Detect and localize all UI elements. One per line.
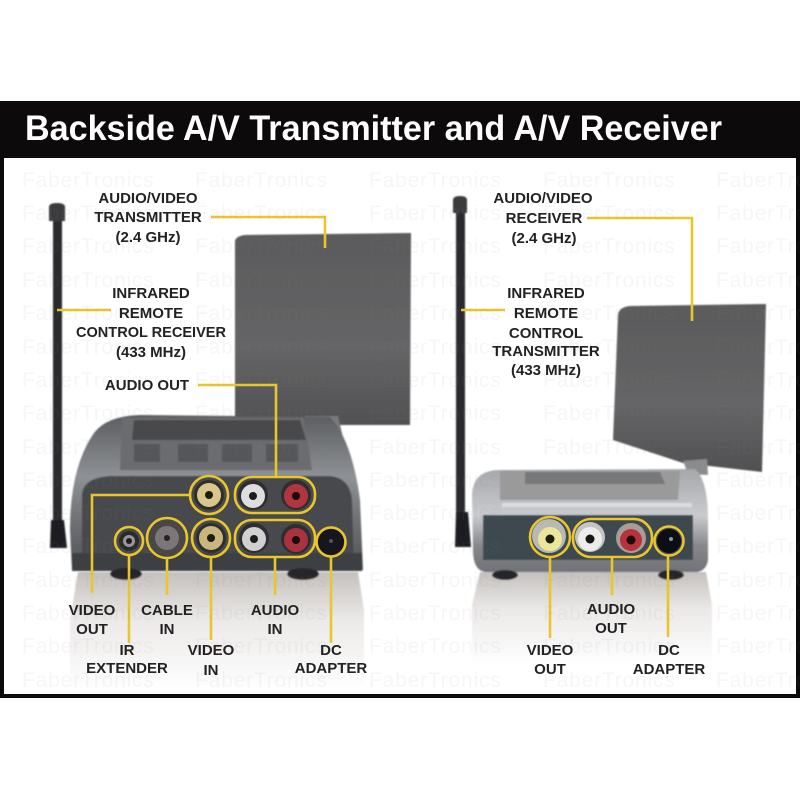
label: receiver DC adapter (633, 642, 705, 678)
label: infrared remote control receiver: (433 MHz) (116, 344, 186, 361)
label: IR extender (86, 642, 168, 677)
watermark: FaberTronics (22, 469, 155, 492)
label: receiver DC adapter: ADAPTER (633, 661, 705, 678)
watermark: FaberTronics (369, 169, 502, 192)
watermark: FaberTronics (22, 169, 155, 192)
label: infrared remote control transmitter: TRANSMITTER (492, 343, 600, 360)
jack: audio in white (239, 523, 269, 553)
watermark: FaberTronics (22, 369, 155, 392)
label: video in: IN (204, 662, 218, 679)
watermark: FaberTronics (195, 436, 328, 459)
watermark: FaberTronics (369, 302, 502, 325)
label: DC adapter: ADAPTER (295, 660, 367, 677)
watermark: FaberTronics (22, 235, 155, 258)
watermark: FaberTronics (543, 336, 676, 359)
jack: receiver audio out red (616, 523, 646, 553)
label: audio/video transmitter: TRANSMITTER (94, 209, 202, 226)
flat antenna panel: transmitter (235, 233, 411, 425)
jack: video in (196, 523, 226, 553)
watermark: FaberTronics (543, 635, 676, 658)
jack: audio out white (238, 480, 268, 510)
labels: transmitter (69, 190, 367, 679)
watermark: FaberTronics (543, 602, 676, 625)
label: audio/video receiver (493, 190, 593, 247)
label: audio in (251, 602, 299, 638)
label: infrared remote control receiver: REMOTE (119, 305, 183, 322)
housing: transmitter (70, 415, 363, 580)
watermark: FaberTronics (22, 269, 155, 292)
label: infrared remote control transmitter (492, 285, 600, 379)
watermark: FaberTronics (22, 336, 155, 359)
panel: receiver device (453, 196, 766, 665)
watermark: FaberTronics (22, 535, 155, 558)
hinge: transmitter (305, 416, 346, 450)
label: cable in (141, 602, 193, 638)
label: cable in: CABLE (141, 602, 193, 619)
label: audio in: AUDIO (251, 602, 299, 619)
label: infrared remote control transmitter: INFRARED (507, 285, 585, 302)
watermark: FaberTronics (195, 202, 328, 225)
watermark: FaberTronics (369, 602, 502, 625)
jack: cable in (149, 520, 185, 556)
watermark: FaberTronics (195, 169, 328, 192)
labels: receiver (492, 190, 705, 678)
label: audio/video receiver: RECEIVER (506, 210, 583, 227)
watermark: FaberTronics (369, 535, 502, 558)
watermark: FaberTronics (369, 402, 502, 425)
jack: DC adapter (318, 529, 344, 555)
label: audio/video transmitter: (2.4 GHz) (115, 229, 181, 246)
watermark: FaberTronics (543, 202, 676, 225)
leader lines: transmitter (57, 217, 331, 643)
watermark: FaberTronics (22, 402, 155, 425)
watermark: FaberTronics (369, 635, 502, 658)
jack: IR extender (119, 531, 139, 551)
connectors: receiver (532, 519, 681, 553)
watermark: FaberTronics (369, 336, 502, 359)
black frame (0, 101, 800, 698)
watermark: FaberTronics (195, 235, 328, 258)
label: cable in: IN (160, 621, 174, 638)
label: infrared remote control transmitter: (433 MHz) (511, 362, 581, 379)
watermark: FaberTronics (22, 669, 155, 692)
jack: audio in red (281, 524, 311, 554)
watermark: FaberTronics (195, 369, 328, 392)
watermark: FaberTronics (195, 402, 328, 425)
label: video out: OUT (76, 621, 108, 638)
label: receiver audio out (587, 601, 635, 637)
watermark: FaberTronics (543, 235, 676, 258)
hinge: receiver (683, 459, 708, 475)
watermark: FaberTronics (543, 402, 676, 425)
callout rings: transmitter (115, 476, 346, 558)
watermark: FaberTronics (369, 202, 502, 225)
flat antenna panel: receiver (613, 304, 766, 472)
label: infrared remote control transmitter: CONTROL (509, 325, 583, 342)
white content panel (4, 158, 796, 694)
jack: receiver DC adapter (657, 529, 681, 553)
watermark: FaberTronics (543, 269, 676, 292)
watermark: FaberTronics (195, 602, 328, 625)
label: receiver audio out: OUT (595, 620, 627, 637)
watermark: FaberTronics (369, 369, 502, 392)
watermark: FaberTronics (22, 202, 155, 225)
antenna: receiver (453, 196, 471, 547)
label: receiver audio out: AUDIO (587, 601, 635, 618)
label: audio out: AUDIO OUT (105, 377, 189, 394)
watermark: FaberTronics (22, 569, 155, 592)
watermark: FaberTronics (543, 669, 676, 692)
watermark: FaberTronics (369, 436, 502, 459)
jack: receiver audio out white (575, 522, 605, 552)
connectors: transmitter (119, 480, 344, 556)
watermark: FaberTronics (543, 169, 676, 192)
label: audio/video receiver: AUDIO/VIDEO (493, 190, 593, 207)
watermark: FaberTronics (22, 502, 155, 525)
label: infrared remote control receiver: INFRARED (112, 285, 190, 302)
watermark: FaberTronics (22, 602, 155, 625)
panel: transmitter device (49, 203, 411, 690)
label: video out: VIDEO (69, 602, 116, 619)
leader lines: receiver (461, 218, 692, 638)
watermark: FaberTronics (369, 669, 502, 692)
watermark: FaberTronics (22, 436, 155, 459)
label: receiver video out (527, 642, 574, 678)
label: receiver video out: OUT (534, 661, 566, 678)
label: receiver DC adapter: DC (658, 642, 680, 659)
watermark: FaberTronics (195, 302, 328, 325)
antenna: transmitter (49, 203, 67, 548)
reflection: receiver (472, 572, 712, 665)
watermark: FaberTronics (369, 235, 502, 258)
watermark: FaberTronics (195, 336, 328, 359)
label: audio/video transmitter (94, 190, 202, 246)
watermark: FaberTronics (195, 269, 328, 292)
watermark: FaberTronics (369, 502, 502, 525)
watermark: FaberTronics (195, 635, 328, 658)
label: receiver video out: VIDEO (527, 642, 574, 659)
label: audio in: IN (268, 621, 282, 638)
label: DC adapter: DC (320, 642, 342, 659)
reflection: transmitter (70, 572, 364, 690)
watermark: FaberTronics (195, 569, 328, 592)
watermark: FaberTronics (543, 436, 676, 459)
label: video in (188, 642, 235, 679)
label: IR extender: EXTENDER (86, 660, 168, 677)
watermark: FaberTronics (195, 669, 328, 692)
label: infrared remote control transmitter: REMOTE (514, 305, 578, 322)
label: video out (69, 602, 116, 638)
watermark: FaberTronics (22, 635, 155, 658)
label: audio/video transmitter: AUDIO/VIDEO (98, 190, 198, 207)
label: infrared remote control receiver (76, 285, 226, 361)
title: Backside A/V Transmitter and A/V Receiver (25, 109, 722, 148)
label: IR extender: IR (120, 642, 135, 659)
watermark: FaberTronics (369, 469, 502, 492)
watermark: FaberTronics (543, 302, 676, 325)
watermark: FaberTronics (369, 569, 502, 592)
watermark: FaberTronics (543, 569, 676, 592)
callout rings: receiver (530, 517, 684, 557)
label: DC adapter (295, 642, 367, 677)
jack: video out (194, 480, 224, 510)
watermark: FaberTronics (22, 302, 155, 325)
watermark: FaberTronics (369, 269, 502, 292)
label: audio/video receiver: (2.4 GHz) (511, 230, 577, 247)
label: infrared remote control receiver: CONTROL RECEIVER (76, 324, 226, 341)
watermark (22, 169, 800, 692)
housing: receiver (472, 469, 708, 580)
jack: audio out red (281, 480, 311, 510)
jack: receiver video out (532, 519, 566, 553)
watermark: FaberTronics (543, 369, 676, 392)
label: video in: VIDEO (188, 642, 235, 659)
